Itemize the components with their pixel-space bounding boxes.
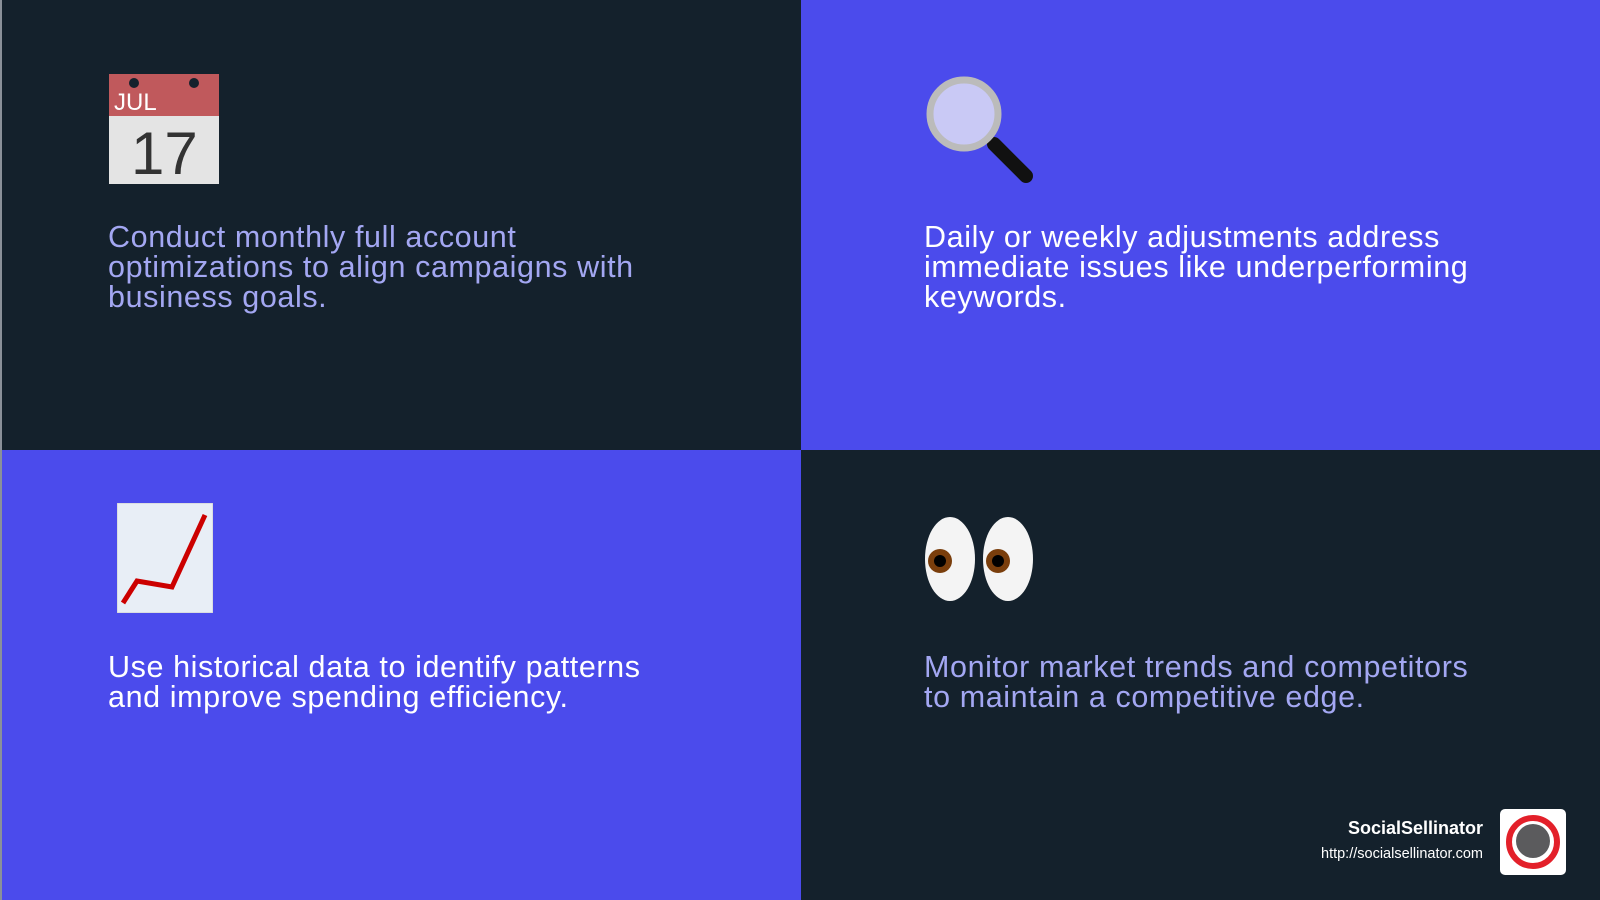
text block: immediate issues like underperforming xyxy=(924,250,1468,284)
icon: eyes xyxy=(925,517,1033,601)
panel: top-right xyxy=(801,0,1600,450)
text block: Use historical data to identify patterns xyxy=(108,650,641,684)
text block: Daily or weekly adjustments address xyxy=(924,220,1440,254)
text block: Conduct monthly full account xyxy=(108,220,516,254)
text block: Monitor market trends and competitors xyxy=(924,650,1468,684)
text block xyxy=(924,220,1468,314)
panel: bottom-left xyxy=(2,450,801,900)
text block: keywords. xyxy=(924,280,1067,314)
text block: and improve spending efficiency. xyxy=(108,680,569,714)
text block xyxy=(108,650,641,714)
panel: top-left xyxy=(2,0,801,450)
text block xyxy=(108,220,634,314)
brand name: SocialSellinator xyxy=(1348,818,1483,838)
text block: optimizations to align campaigns with xyxy=(108,250,634,284)
text block xyxy=(924,650,1468,714)
text block: to maintain a competitive edge. xyxy=(924,680,1365,714)
logo xyxy=(1500,809,1566,875)
icon: chart xyxy=(117,503,213,613)
text block: business goals. xyxy=(108,280,327,314)
panel: bottom-right xyxy=(801,450,1600,900)
icon: magnifier xyxy=(926,76,1033,183)
icon: calendar: JUL xyxy=(114,89,157,116)
brand url: http://socialsellinator.com xyxy=(1321,846,1483,862)
icon: calendar xyxy=(109,74,219,184)
